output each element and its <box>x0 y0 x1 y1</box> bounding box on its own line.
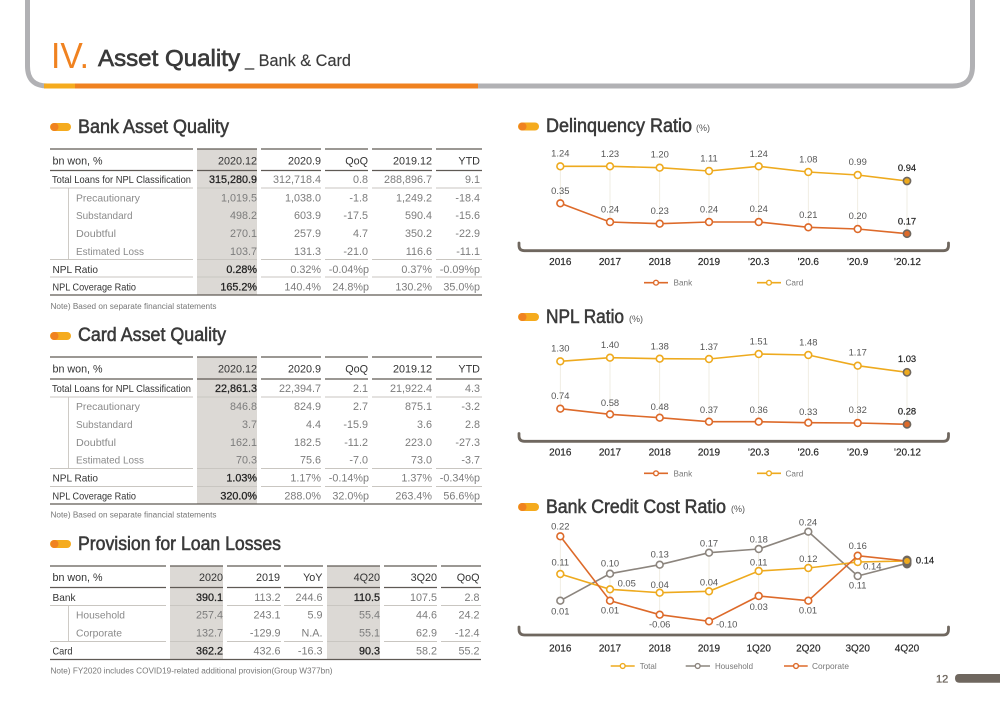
table: Provision for Loan Losses: 44.6 <box>416 610 437 622</box>
table: Bank Asset Quality: 288,896.7 <box>384 174 432 186</box>
series: Card: 1.40 <box>601 339 619 350</box>
series: Card: 1.20 <box>651 148 669 160</box>
table: Provision for Loan Losses: 24.2 <box>458 610 480 622</box>
table: Card Asset Quality: 70.3 <box>236 454 257 466</box>
table: Provision for Loan Losses: 244.6 <box>295 592 322 604</box>
axis labels <box>549 644 920 655</box>
table: Card Asset Quality: 73.0 <box>411 454 432 466</box>
table: Provision for Loan Losses: 257.4 <box>196 610 223 622</box>
axis labels: 2019 <box>698 644 721 655</box>
table: Provision for Loan Losses: -129.9 <box>250 628 280 640</box>
table: Provision for Loan Losses: N.A. <box>302 628 322 640</box>
table: Card Asset Quality: bn won, % <box>52 364 103 376</box>
series: Card: 1.03 <box>898 353 916 364</box>
table: Bank Asset Quality: 1,038.0 <box>285 192 321 204</box>
table: Card Asset Quality: -11.2 <box>344 437 368 449</box>
table: Card Asset Quality: 2019.12 <box>393 364 432 376</box>
axis bracket <box>519 243 948 251</box>
table: Provision for Loan Losses: -16.3 <box>298 646 322 658</box>
legend: Bank <box>674 279 693 288</box>
series: Card <box>551 148 916 185</box>
end point: 4Q20: 0.14 <box>916 554 934 566</box>
table: Bank Asset Quality: Precautionary <box>76 192 141 204</box>
table: Bank Asset Quality: 1,249.2 <box>396 192 432 204</box>
legend: Bank <box>674 469 693 478</box>
axis labels <box>549 257 921 268</box>
table: Card Asset Quality: -27.3 <box>455 437 480 449</box>
heading: Delinquency Ratio: (%) <box>696 123 710 133</box>
table: Card Asset Quality: 846.8 <box>230 401 257 413</box>
table: Card Asset Quality: 22,861.3 <box>215 383 257 395</box>
axis bracket <box>519 627 948 635</box>
title: Asset Quality <box>98 45 241 71</box>
axis labels: 2Q20 <box>796 644 821 655</box>
table: Card Asset Quality: 288.0% <box>284 490 321 502</box>
table: Card Asset Quality: 223.0 <box>405 437 432 449</box>
series: Bank <box>551 390 916 428</box>
axis labels <box>549 447 921 458</box>
table: Provision for Loan Losses: bn won, % <box>52 572 103 584</box>
title <box>51 35 351 76</box>
table: Provision for Loan Losses: Bank <box>52 592 76 604</box>
table: Bank Asset Quality: 350.2 <box>405 228 432 240</box>
table: Card Asset Quality: Doubtful <box>76 437 116 449</box>
table: Bank Asset Quality: 9.1 <box>465 174 480 186</box>
axis labels: 2018 <box>649 257 671 268</box>
axis bracket <box>519 434 948 441</box>
series: Household: 0.18 <box>750 534 768 545</box>
legend: Household <box>715 662 753 671</box>
series: Card: 1.51 <box>750 336 768 346</box>
series: Card: 0.94 <box>898 162 916 173</box>
table: Card Asset Quality: 32.0%p <box>332 490 369 502</box>
series: Card: 1.30 <box>551 342 569 354</box>
series: Household <box>551 517 907 617</box>
table: Bank Asset Quality: 270.1 <box>230 228 257 240</box>
series: Card: 1.23 <box>601 148 619 159</box>
table: Card Asset Quality: 875.1 <box>405 401 432 413</box>
table: Bank Asset Quality: -11.1 <box>456 246 480 258</box>
series: Household: 0.24 <box>799 517 817 528</box>
table: Card Asset Quality: -3.2 <box>461 401 480 413</box>
table: Bank Asset Quality: 116.6 <box>406 246 432 258</box>
table: Bank Asset Quality: 590.4 <box>405 210 432 222</box>
end point: 4Q20 <box>902 554 934 568</box>
table: Card Asset Quality: -3.7 <box>461 454 480 466</box>
table: Bank Asset Quality: 130.2% <box>395 282 432 294</box>
series: Total: 0.11 <box>552 556 569 567</box>
table: Bank Asset Quality: Doubtful <box>76 228 116 240</box>
axis labels: 4Q20 <box>895 644 920 655</box>
series: Bank: 0.74 <box>551 390 569 401</box>
series: Total: 0.04 <box>700 577 718 588</box>
series: Household: 0.10 <box>601 558 619 569</box>
table: Card Asset Quality: 182.5 <box>294 437 321 449</box>
table: Card Asset Quality: Precautionary <box>76 401 141 413</box>
axis labels: 2018 <box>649 644 671 655</box>
heading: NPL Ratio <box>518 307 643 328</box>
table: Provision for Loan Losses <box>50 566 481 660</box>
series: Card: 1.37 <box>700 341 718 352</box>
table: Provision for Loan Losses: 2019 <box>256 572 280 584</box>
axis labels: 2017 <box>599 447 622 458</box>
table: Provision for Loan Losses: 113.2 <box>254 592 280 604</box>
axis labels: '20.9 <box>847 257 869 268</box>
axis labels: 2017 <box>599 257 622 268</box>
chart: Delinquency Ratio <box>519 148 948 288</box>
table: Card Asset Quality: NPL Coverage Ratio <box>52 490 136 502</box>
table: Card Asset Quality: 824.9 <box>294 401 321 413</box>
series: Card: 1.48 <box>799 336 817 348</box>
series: Household: 0.17 <box>700 538 718 549</box>
table: Bank Asset Quality: Estimated Loss <box>76 246 144 258</box>
series: Card: 1.11 <box>700 152 718 164</box>
table: Provision for Loan Losses: 2.8 <box>464 592 480 604</box>
table: Bank Asset Quality: 0.32% <box>290 264 321 276</box>
heading: Bank Credit Cost Ratio: (%) <box>731 504 745 514</box>
table: Card Asset Quality: 3.6 <box>417 419 432 431</box>
table: Bank Asset Quality: -17.5 <box>343 210 368 222</box>
axis labels: '20.9 <box>847 447 869 458</box>
table: Provision for Loan Losses: 432.6 <box>253 646 280 658</box>
heading: Card Asset Quality: Card Asset Quality <box>78 325 226 346</box>
table: Bank Asset Quality: 603.9 <box>294 210 321 222</box>
table: Provision for Loan Losses: -12.4 <box>455 628 480 640</box>
table: Bank Asset Quality: 103.7 <box>230 246 257 258</box>
table: Bank Asset Quality: Total Loans for NPL Classification <box>52 174 191 186</box>
table: Provision for Loan Losses: 90.3 <box>359 646 380 658</box>
table: Bank Asset Quality: 1,019.5 <box>221 192 257 204</box>
series: Corporate <box>551 521 907 629</box>
table: Bank Asset Quality <box>50 149 482 295</box>
table: Bank Asset Quality: 140.4% <box>284 282 321 294</box>
table: Provision for Loan Losses: Card <box>52 646 73 658</box>
page number: 12 <box>936 674 948 686</box>
table: Card Asset Quality: Substandard <box>76 419 133 431</box>
table: Provision for Loan Losses: 243.1 <box>253 610 280 622</box>
axis labels: 2019 <box>698 257 721 268</box>
table: Card Asset Quality: Estimated Loss <box>76 454 144 466</box>
series: Bank: 0.28 <box>898 406 916 416</box>
table: Provision for Loan Losses: Household <box>76 610 125 622</box>
page number <box>936 674 1000 686</box>
table: Bank Asset Quality: 2020.12 <box>218 156 257 168</box>
series: Card: 1.17 <box>849 346 867 358</box>
series: Bank: 0.58 <box>601 397 619 408</box>
series: Bank: 0.24 <box>700 204 718 215</box>
table: Bank Asset Quality: -0.09%p <box>440 264 480 276</box>
title: _ Bank & Card <box>244 51 351 70</box>
table: Provision for Loan Losses: 55.1 <box>359 628 380 640</box>
table: Bank Asset Quality: 2019.12 <box>393 156 432 168</box>
series: Bank: 0.17 <box>898 215 916 226</box>
table: Card Asset Quality: 162.1 <box>230 437 257 449</box>
table: Bank Asset Quality: 0.28% <box>226 264 257 276</box>
table: Provision for Loan Losses: QoQ <box>457 572 480 584</box>
table: Bank Asset Quality: -15.6 <box>455 210 480 222</box>
series: Total: 0.11 <box>750 556 767 567</box>
table: Bank Asset Quality: -1.8 <box>349 192 368 204</box>
table: Card Asset Quality: QoQ <box>345 364 368 376</box>
table: Card Asset Quality: 21,922.4 <box>390 383 432 395</box>
note: card asset quality: Note) Based on separate financial statements <box>50 510 216 520</box>
axis labels: '20.12 <box>894 447 921 458</box>
series: Bank: 0.32 <box>849 404 867 415</box>
axis labels: 2018 <box>649 447 671 458</box>
table: Bank Asset Quality: 2020.9 <box>288 156 321 168</box>
table: Provision for Loan Losses: 2020 <box>199 572 223 584</box>
series: Corporate: 0.22 <box>551 521 569 532</box>
legend: Card <box>786 279 804 288</box>
table: Provision for Loan Losses: 5.9 <box>307 610 322 622</box>
axis labels: 3Q20 <box>845 644 870 655</box>
series: Bank: 0.36 <box>750 404 768 415</box>
axis labels: 1Q20 <box>746 644 771 655</box>
table: Provision for Loan Losses: 55.4 <box>359 610 380 622</box>
table: Bank Asset Quality: NPL Coverage Ratio <box>52 282 136 294</box>
table: Bank Asset Quality: Substandard <box>76 210 133 222</box>
table: Provision for Loan Losses: 3Q20 <box>411 572 437 584</box>
table: Card Asset Quality: 263.4% <box>395 490 432 502</box>
series: Household: 0.11 <box>849 579 866 590</box>
series: Bank: 0.24 <box>750 203 768 214</box>
table: Card Asset Quality: 2.8 <box>465 419 480 431</box>
axis labels: 2016 <box>549 644 572 655</box>
axis labels: '20.6 <box>798 447 819 458</box>
series: Bank: 0.21 <box>799 209 817 220</box>
chart: Bank Credit Cost Ratio <box>519 517 948 671</box>
table: Bank Asset Quality: 315,280.9 <box>209 174 257 186</box>
table: Card Asset Quality: 4.4 <box>306 419 321 431</box>
table: Card Asset Quality: 56.6%p <box>443 490 480 502</box>
table: Card Asset Quality: 2.1 <box>353 383 368 395</box>
table: Provision for Loan Losses: 4Q20 <box>354 572 380 584</box>
table: Provision for Loan Losses: 62.9 <box>416 628 437 640</box>
legend: Total <box>640 662 657 671</box>
series: Household: 0.01 <box>551 606 569 617</box>
table: Card Asset Quality: -0.14%p <box>329 472 369 484</box>
series: Corporate: 0.16 <box>849 540 867 551</box>
table: Provision for Loan Losses: 390.1 <box>196 592 223 604</box>
table: Provision for Loan Losses: 107.5 <box>410 592 437 604</box>
series: Corporate: -0.10 <box>716 618 737 629</box>
axis labels: 2019 <box>698 447 721 458</box>
table: Bank Asset Quality: 0.8 <box>353 174 368 186</box>
legend: Corporate <box>812 662 849 671</box>
axis labels: '20.3 <box>748 447 770 458</box>
legend: Card <box>786 469 804 478</box>
series: Corporate: -0.06 <box>649 618 670 629</box>
table: Card Asset Quality <box>50 357 482 504</box>
heading: NPL Ratio: (%) <box>629 314 643 324</box>
series: Corporate: 0.01 <box>799 604 817 615</box>
table: Card Asset Quality: -15.9 <box>343 419 368 431</box>
series: Bank: 0.48 <box>651 401 669 412</box>
table: Provision for Loan Losses: 55.2 <box>458 646 480 658</box>
series: Total <box>552 553 907 596</box>
axis labels: 2016 <box>549 257 572 268</box>
axis labels: 2017 <box>599 644 622 655</box>
series: Corporate: 0.03 <box>750 601 768 612</box>
series: Card: 0.99 <box>849 156 867 167</box>
heading: Provision for Loan Losses: Provision for Loan Losses <box>78 534 281 555</box>
table: Card Asset Quality: 1.03% <box>226 472 257 484</box>
table: Card Asset Quality: NPL Ratio <box>52 472 98 484</box>
series: Card: 1.24 <box>750 148 768 159</box>
table: Card Asset Quality: 1.37% <box>401 472 432 484</box>
series: Card: 1.24 <box>551 148 569 158</box>
heading: NPL Ratio: NPL Ratio <box>546 307 624 328</box>
series: Bank: 0.33 <box>799 406 817 417</box>
table: Card Asset Quality: Total Loans for NPL Classification <box>52 383 191 395</box>
table: Card Asset Quality: -7.0 <box>349 454 368 466</box>
series: Bank: 0.20 <box>849 210 867 221</box>
series: Household: 0.13 <box>651 549 669 560</box>
legend <box>644 469 804 478</box>
table: Card Asset Quality: 75.6 <box>300 454 321 466</box>
series: Corporate: 0.01 <box>601 604 619 615</box>
table: Bank Asset Quality: 498.2 <box>230 210 257 222</box>
series: Card: 1.08 <box>799 154 817 164</box>
table: Card Asset Quality: 4.3 <box>465 383 480 395</box>
table: Bank Asset Quality: -22.9 <box>455 228 480 240</box>
title: IV. <box>51 35 89 76</box>
table: Card Asset Quality: 320.0% <box>220 490 257 502</box>
table: Card Asset Quality: YTD <box>458 364 480 376</box>
series: Total: 0.14 <box>863 560 881 571</box>
table: Provision for Loan Losses: Corporate <box>76 628 122 640</box>
table: Card Asset Quality: 2020.9 <box>288 364 321 376</box>
table: Provision for Loan Losses: 132.7 <box>196 628 223 640</box>
table: Bank Asset Quality: 4.7 <box>353 228 368 240</box>
table: Bank Asset Quality: 35.0%p <box>443 282 480 294</box>
table: Bank Asset Quality: 131.3 <box>294 246 321 258</box>
table: Bank Asset Quality: 24.8%p <box>332 282 369 294</box>
table: Provision for Loan Losses: YoY <box>303 572 322 584</box>
heading: Bank Credit Cost Ratio: Bank Credit Cost Ratio <box>546 497 726 518</box>
table: Bank Asset Quality: -0.04%p <box>329 264 369 276</box>
series: Bank: 0.23 <box>651 205 669 216</box>
series: Bank: 0.35 <box>551 185 569 196</box>
table: Card Asset Quality: -0.34%p <box>440 472 480 484</box>
axis labels: '20.3 <box>748 257 770 268</box>
series: Bank: 0.24 <box>601 203 619 214</box>
table: Card Asset Quality: 3.7 <box>242 419 257 431</box>
table: Bank Asset Quality: YTD <box>458 156 480 168</box>
table: Card Asset Quality: 2020.12 <box>218 364 257 376</box>
series: Total: 0.12 <box>799 553 817 564</box>
table: Card Asset Quality: 22,394.7 <box>279 383 321 395</box>
heading: Bank Asset Quality: Bank Asset Quality <box>78 117 229 138</box>
table: Bank Asset Quality: 165.2% <box>220 282 257 294</box>
chart: NPL Ratio <box>519 336 948 478</box>
table: Bank Asset Quality: -21.0 <box>343 246 368 258</box>
table: Bank Asset Quality: NPL Ratio <box>52 264 98 276</box>
series: Total: 0.05 <box>618 577 636 588</box>
table: Bank Asset Quality: 0.37% <box>401 264 432 276</box>
heading: Delinquency Ratio: Delinquency Ratio <box>546 116 692 137</box>
series: Total: 0.04 <box>651 579 669 590</box>
table: Provision for Loan Losses: 58.2 <box>416 646 437 658</box>
legend <box>644 279 804 288</box>
table: Provision for Loan Losses: 362.2 <box>196 646 223 658</box>
note: provision for loan losses: Note) FY2020 includes COVID19-related additional provision(Group W377bn) <box>50 666 333 676</box>
table: Card Asset Quality: 2.7 <box>353 401 368 413</box>
axis labels: '20.6 <box>798 257 819 268</box>
table: Provision for Loan Losses: 110.5 <box>354 592 380 604</box>
table: Bank Asset Quality: bn won, % <box>52 156 103 168</box>
table: Bank Asset Quality: QoQ <box>345 156 368 168</box>
table: Bank Asset Quality: 312,718.4 <box>273 174 321 186</box>
table: Bank Asset Quality: 257.9 <box>294 228 321 240</box>
axis labels: '20.12 <box>894 257 921 268</box>
legend <box>611 662 849 671</box>
note: bank asset quality: Note) Based on separate financial statements <box>50 302 216 311</box>
series: Card <box>551 336 916 376</box>
series: Card: 1.38 <box>651 340 669 352</box>
header frame <box>28 0 972 88</box>
table: Bank Asset Quality: -18.4 <box>455 192 480 204</box>
series: Bank: 0.37 <box>700 404 718 415</box>
axis labels: 2016 <box>549 447 572 458</box>
series: Bank <box>551 185 916 237</box>
table: Card Asset Quality: 1.17% <box>290 472 321 484</box>
